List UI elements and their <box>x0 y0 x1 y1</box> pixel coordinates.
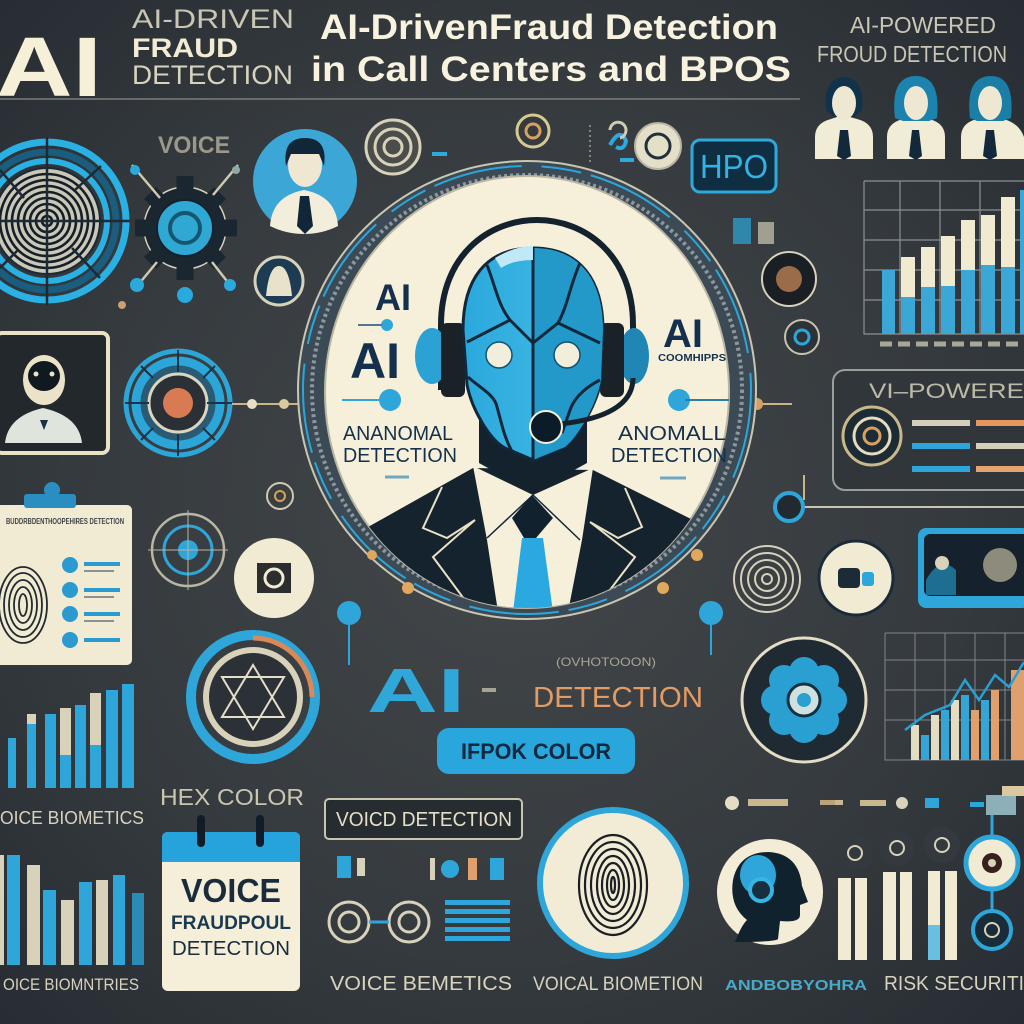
nodes above center row <box>337 601 723 665</box>
chart: seals and paired bars <box>837 827 960 960</box>
icon: small target ring <box>148 510 228 590</box>
heading: AI-powered fraud detection right <box>817 12 1007 67</box>
panel: calendar voice card <box>162 815 300 991</box>
connector: right <box>751 398 804 500</box>
label: voice biometrics top: OICE BIOMETICS <box>0 808 144 828</box>
panel: calendar voice card: VOICE <box>181 872 281 909</box>
circle labels left <box>343 277 457 467</box>
connector: circle to target <box>232 399 300 409</box>
pill: IFPOK color: IFPOK COLOR <box>461 739 611 764</box>
circle labels left: AI <box>350 333 400 389</box>
circle labels right: DETECTION <box>611 445 727 467</box>
icon: map seal <box>234 538 314 618</box>
heading: AI-Driven fraud detection left: DETECTION <box>132 60 293 90</box>
chart: lower left bars <box>0 855 144 965</box>
circle accents <box>342 319 729 478</box>
icons: small fingerprint seals top <box>366 115 681 174</box>
chart: top right bars <box>864 181 1024 344</box>
pill: IFPOK color <box>437 728 635 774</box>
badge: HPO <box>692 140 776 192</box>
icon: star-of-david seal <box>191 635 315 759</box>
icon: chat seal <box>819 541 893 615</box>
label: vocal biomention: VOICAL BIOMETION <box>533 974 703 995</box>
title <box>311 8 791 89</box>
icon: target orange core <box>125 350 232 456</box>
icon: small seal <box>267 483 293 509</box>
icon: lens stack <box>966 815 1018 949</box>
icon: small seal left <box>255 257 303 305</box>
panel: calendar voice card: DETECTION <box>172 938 290 960</box>
connector: node to right edge <box>775 493 1024 521</box>
label: voice bemetics: VOICE BEMETICS <box>330 973 512 995</box>
icon: radar fingerprint <box>0 137 130 305</box>
row: icons strip <box>725 786 1024 815</box>
chart: left blue bars <box>8 684 134 788</box>
heading: AI Detection: (OVHOTOOON) <box>556 655 656 669</box>
ring beads <box>367 549 703 594</box>
circle labels right: COOMHIPPS <box>658 353 726 364</box>
circle labels right: ANOMALL <box>618 423 726 445</box>
panel: voiced detection <box>325 799 522 942</box>
heading: AI Detection <box>367 655 703 726</box>
icon: flower seal <box>742 638 866 762</box>
icons: small icons right of circle <box>733 218 819 354</box>
circle labels left: ANANOMAL <box>343 423 453 445</box>
microphone with boom <box>530 378 633 443</box>
icon: agent portrait <box>253 129 357 234</box>
title: in Call Centers and BPOS <box>311 50 791 89</box>
chart: bottom right bars and line <box>885 633 1024 760</box>
panel: checklist clipboard <box>0 482 132 665</box>
circle labels right <box>611 312 727 467</box>
heading: AI Detection: DETECTION <box>533 682 703 714</box>
heading: AI-Driven fraud detection left: AI-DRIVEN <box>132 4 294 34</box>
label: risk security: ANDBOBYOHRA <box>725 977 867 994</box>
label: Hex color: HEX COLOR <box>160 784 304 810</box>
heading: AI Detection: AI <box>367 657 465 726</box>
heading: AI-Driven fraud detection left: FRAUD <box>132 33 238 63</box>
central portrait circle <box>298 161 756 620</box>
panel: calendar voice card: FRAUDPOUL <box>171 913 291 934</box>
headset <box>415 220 649 397</box>
heading: AI-powered fraud detection right: AI-POWERED <box>850 12 996 38</box>
label: voice biomntries: OICE BIOMNTRIES <box>3 975 139 994</box>
icon: gear with fingerprint <box>118 165 240 309</box>
icon: fingerprint circle right <box>734 546 800 612</box>
robot neck <box>479 420 587 493</box>
label: risk security <box>725 973 1024 995</box>
agent avatars row <box>815 76 1024 160</box>
circle labels left: DETECTION <box>343 445 457 467</box>
panel: VI-powered: VI–POWERE <box>869 380 1024 403</box>
panel: agent card left <box>0 333 108 453</box>
panel: checklist clipboard: BUDDRBDENTHOOPEHIRES DETECTION <box>6 517 124 526</box>
badge: voice label: VOICE <box>158 132 230 159</box>
robot head <box>463 246 603 460</box>
panel: VI-powered <box>833 370 1024 490</box>
icon: fingerprint big <box>540 810 686 956</box>
circle labels left: AI <box>375 277 411 318</box>
badge: HPO: HPO <box>700 148 768 185</box>
suit <box>369 468 690 608</box>
circle labels right: AI <box>663 312 703 356</box>
heading: AI-Driven fraud detection left <box>132 4 294 90</box>
icon: head silhouette <box>717 839 823 945</box>
title: AI-DrivenFraud Detection <box>320 8 778 47</box>
panel: scene card right <box>918 528 1024 608</box>
panel: voiced detection: VOICD DETECTION <box>336 809 512 831</box>
